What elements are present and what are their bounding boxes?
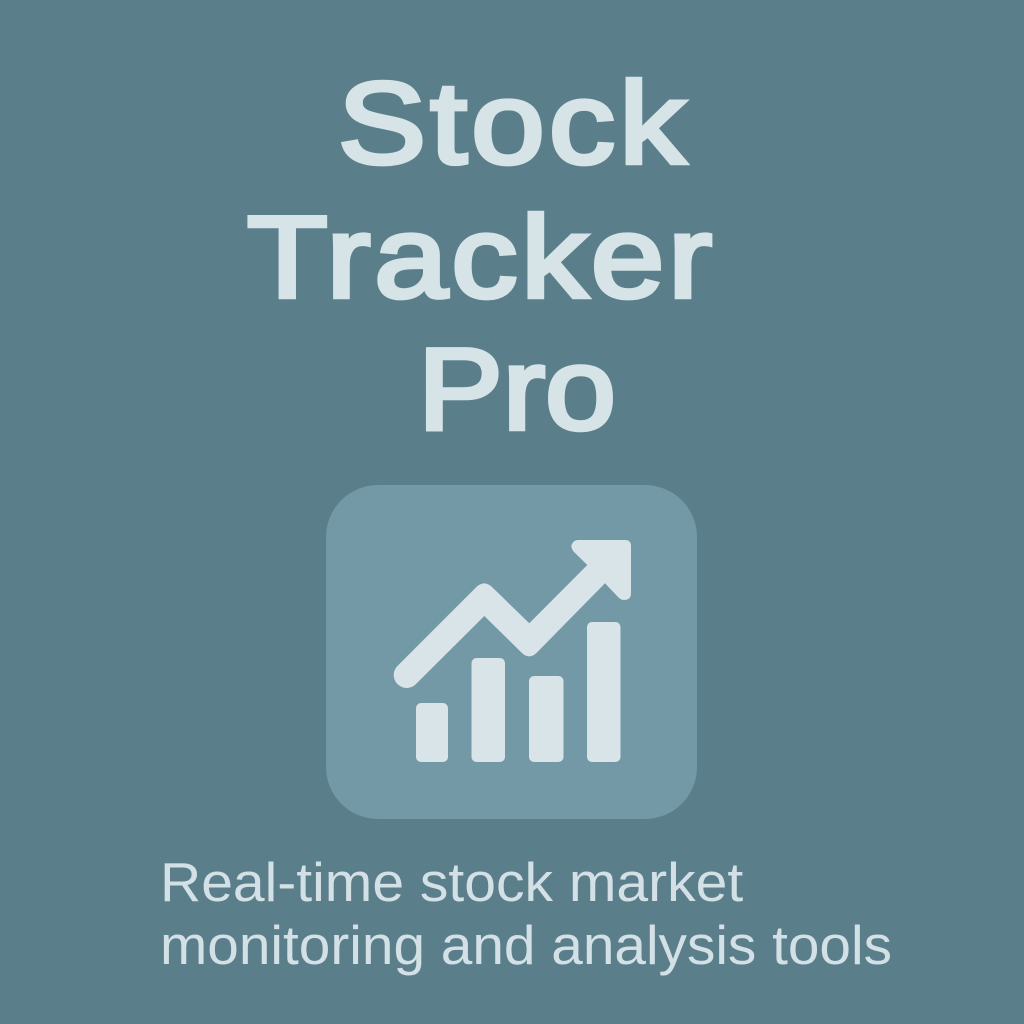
icon: trend line with arrow [394, 540, 631, 688]
icon: stock chart tile [326, 485, 697, 819]
icon: bar chart [416, 622, 620, 762]
tagline [160, 851, 892, 976]
title: Stock [338, 58, 689, 188]
tagline: monitoring and analysis tools [160, 914, 892, 976]
tagline: Real-time stock market [160, 851, 743, 913]
title: Pro [418, 324, 616, 454]
title [247, 58, 716, 454]
title: Tracker [247, 192, 716, 322]
